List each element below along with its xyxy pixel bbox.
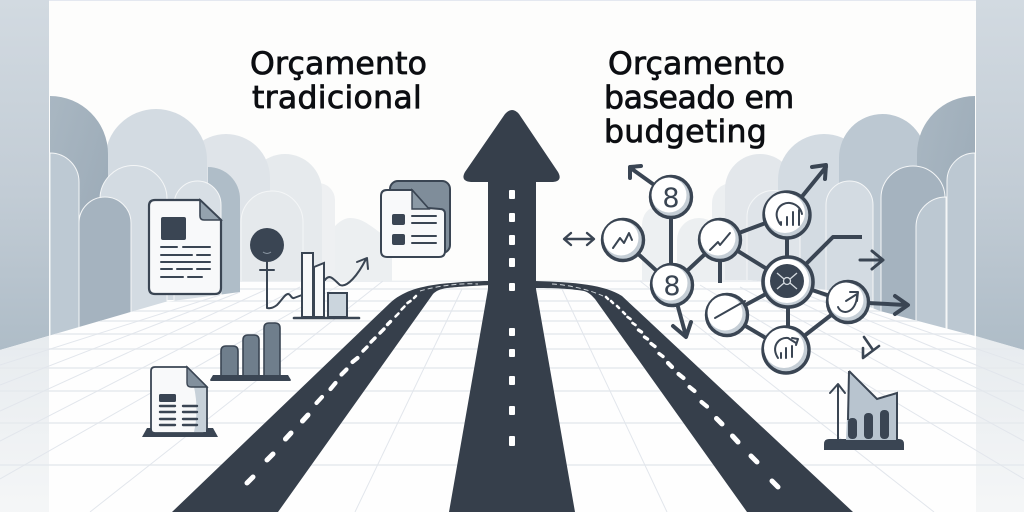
icon: bar chart — [210, 323, 291, 381]
node: number eight top: 8 — [662, 183, 680, 214]
center road arrow — [449, 110, 575, 512]
node: trend line left — [602, 220, 644, 260]
node: number eight top — [650, 176, 692, 218]
icon: document with image — [149, 200, 221, 294]
node: trend line center — [700, 220, 740, 260]
icon: spreadsheet document — [142, 367, 218, 437]
right side panel — [976, 0, 1024, 352]
heading: budgeting-based budget: Orçamento — [608, 46, 785, 82]
right background hills — [642, 96, 975, 345]
floor with perspective grid — [0, 280, 1024, 512]
heading: budgeting-based budget: baseado em — [604, 80, 794, 116]
left background hills — [50, 96, 392, 340]
icon: building chart with up arrow — [824, 371, 904, 450]
right arrow — [860, 251, 883, 269]
left side panel — [0, 0, 49, 352]
node: number eight lower: 8 — [663, 271, 681, 302]
node: gauge bars bottom — [763, 327, 809, 373]
node: circular arrow — [828, 282, 868, 322]
node: central hub — [763, 257, 813, 307]
small down arrow — [863, 337, 879, 358]
double arrow — [564, 233, 594, 245]
heading: budgeting-based budget: budgeting — [604, 114, 767, 150]
node: gauge bars top — [764, 192, 810, 238]
heading: traditional budget: Orçamento — [250, 46, 427, 82]
heading: traditional budget: tradicional — [252, 80, 422, 116]
network connectors and arrows — [623, 165, 908, 350]
icon: stacked documents — [381, 181, 450, 257]
node: slash — [706, 294, 748, 336]
icon: lollipop marker with line and bars — [250, 228, 368, 318]
node: number eight lower — [652, 264, 692, 306]
right road — [535, 281, 853, 512]
left road — [172, 281, 490, 512]
